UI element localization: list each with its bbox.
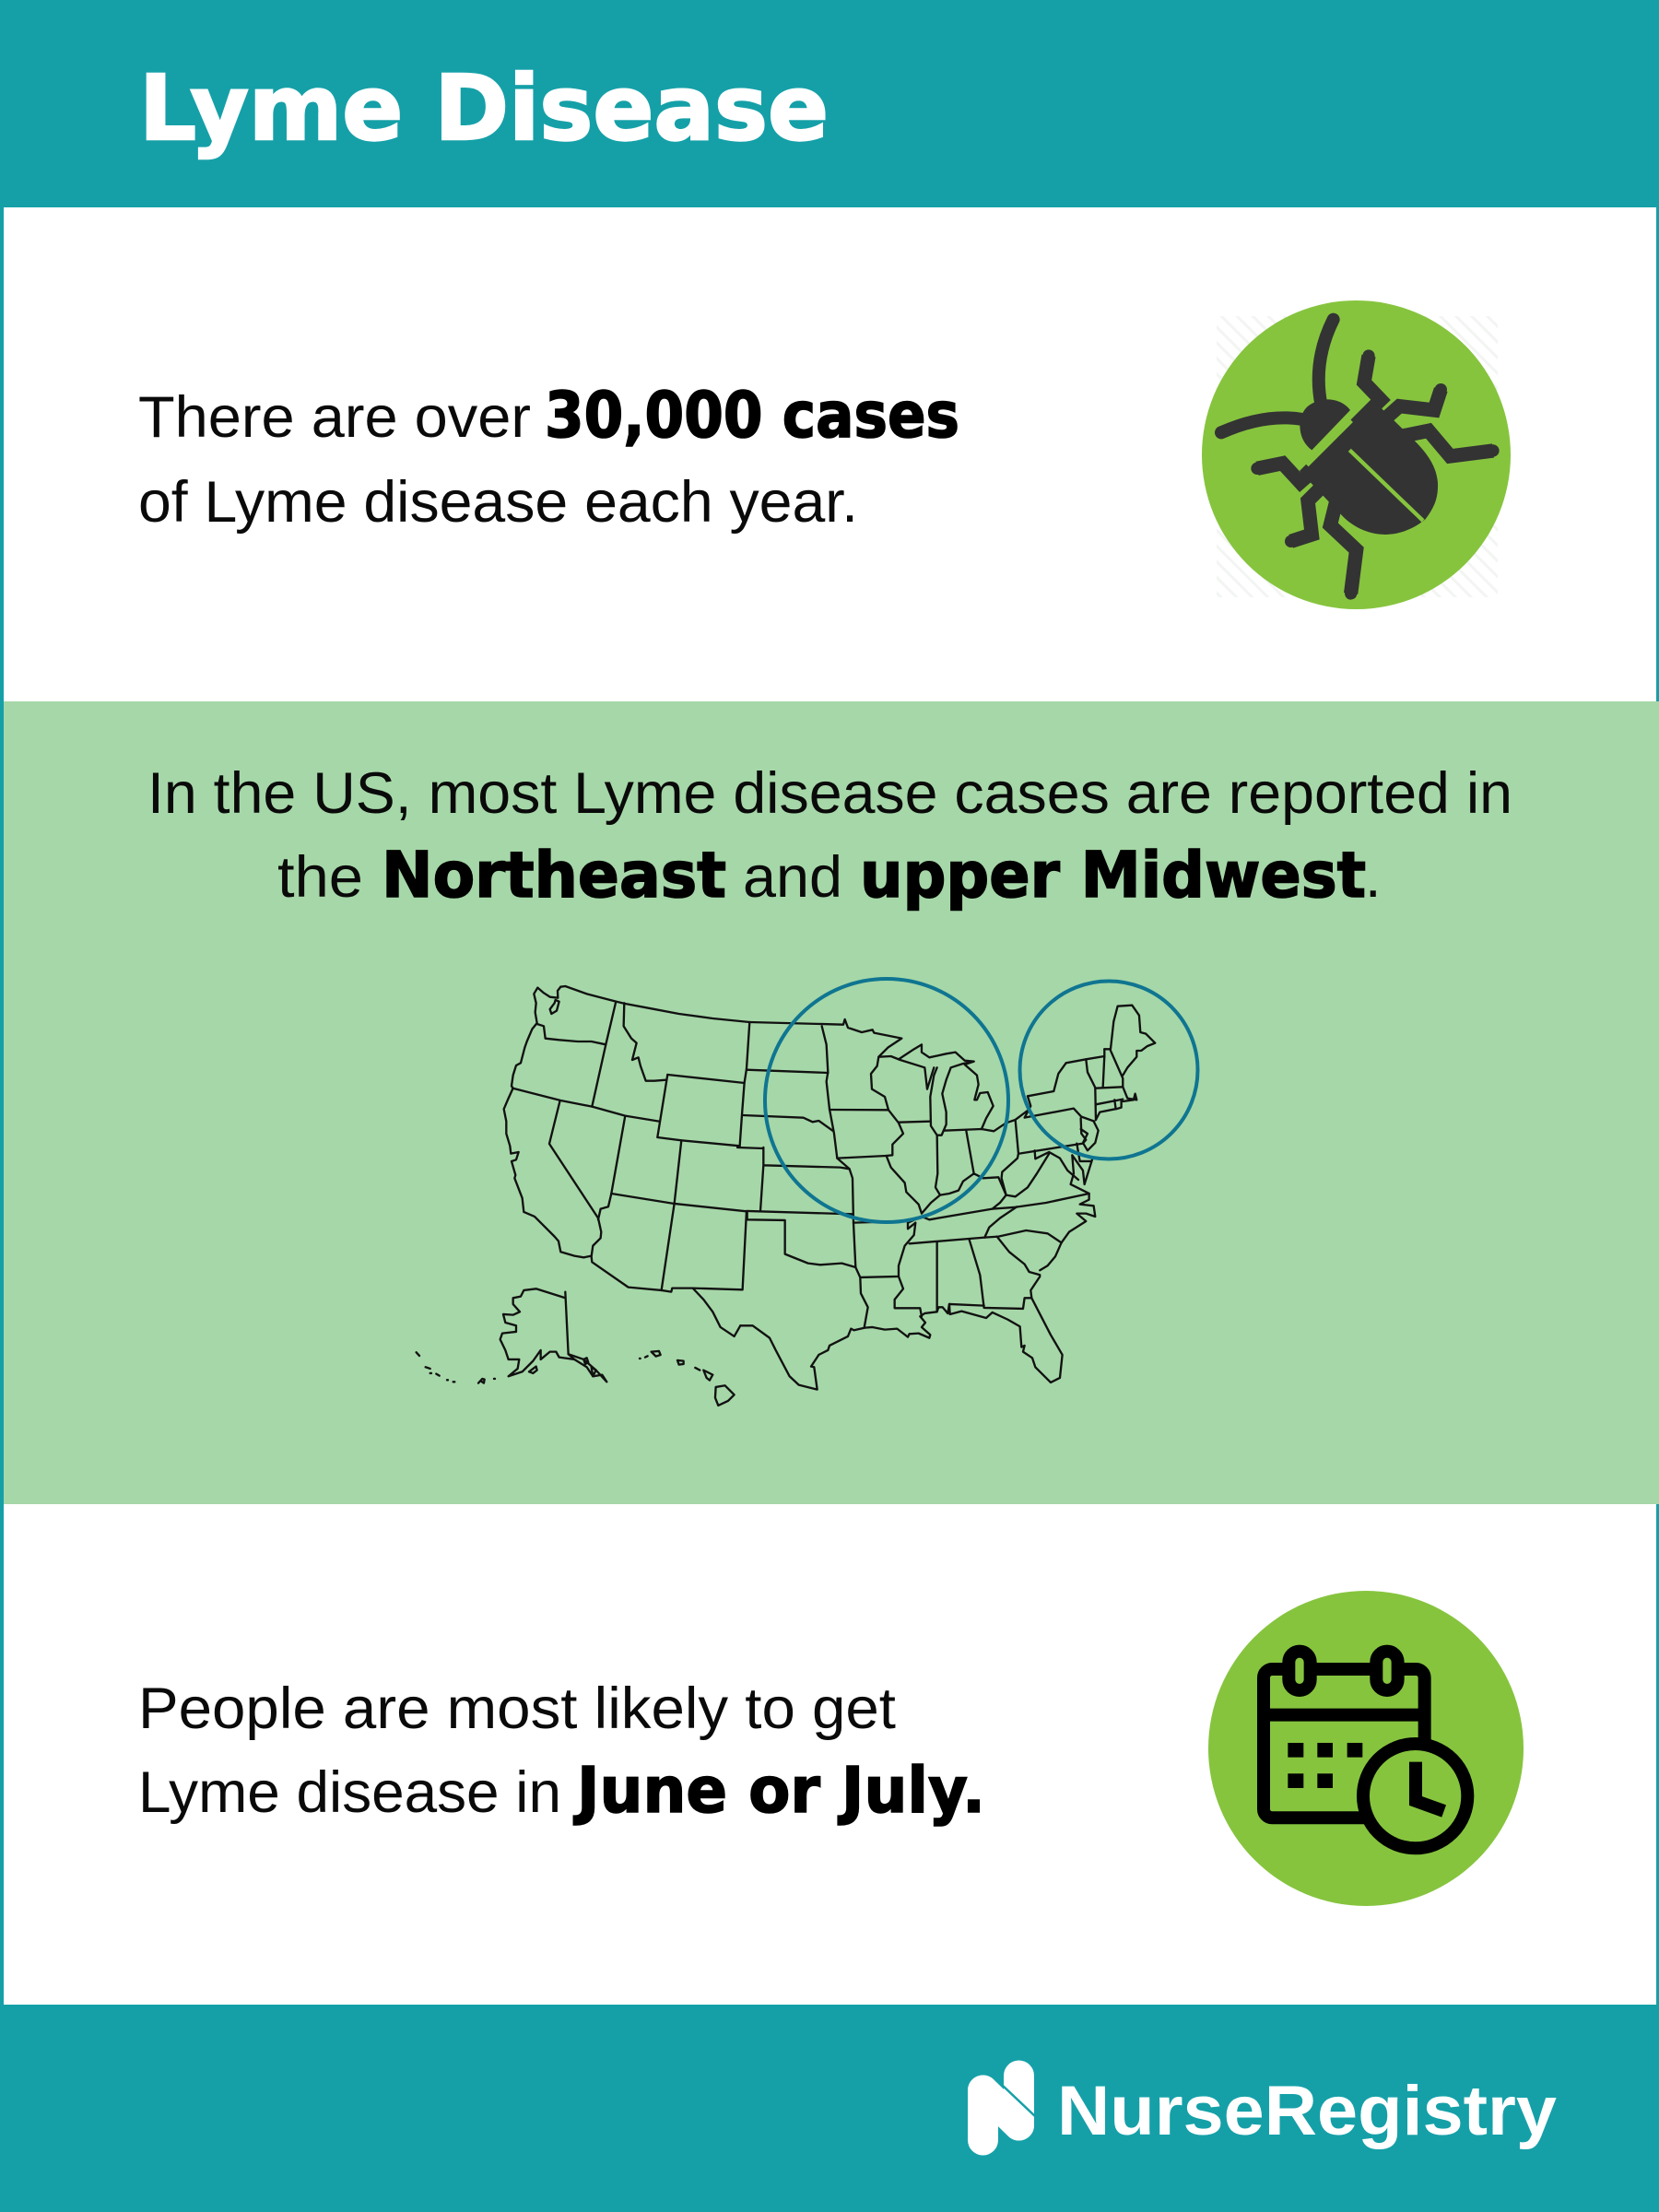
text: June or July bbox=[138, 1677, 985, 1828]
map: United States outline bbox=[417, 986, 1155, 1406]
text: Northeast and upper Midwest: and bbox=[743, 845, 842, 910]
text: June or July: People are most likely to get bbox=[138, 1677, 896, 1741]
panel: peak months bbox=[4, 1504, 1656, 2005]
text: over 30,000 cases bbox=[138, 379, 959, 535]
text: over 30,000 cases: 30,000 cases bbox=[545, 379, 959, 453]
text: over 30,000 cases: of Lyme disease each year. bbox=[138, 470, 858, 535]
text: Northeast and upper Midwest bbox=[147, 761, 1512, 912]
text: over 30,000 cases: There are over bbox=[138, 385, 531, 450]
icon: calendar and clock bbox=[1208, 1591, 1524, 1906]
circle: upper Midwest highlight bbox=[765, 979, 1008, 1222]
text: Northeast and upper Midwest: the bbox=[277, 845, 363, 910]
icon: tick in green circle bbox=[1202, 300, 1511, 609]
circle: Northeast highlight bbox=[1019, 981, 1198, 1159]
text: Northeast and upper Midwest: Northeast bbox=[382, 839, 726, 912]
panel: US map section bbox=[4, 701, 1659, 1504]
icon: N mark bbox=[982, 2076, 1036, 2140]
text: June or July: June or July. bbox=[573, 1754, 985, 1828]
text: Northeast and upper Midwest: upper Midwest bbox=[860, 839, 1366, 912]
panel: header bbox=[0, 0, 1659, 207]
logo: NurseRegistry bbox=[982, 2072, 1557, 2150]
logo wordmark: NurseRegistry bbox=[1057, 2072, 1557, 2150]
text: Northeast and upper Midwest: In the US, most Lyme disease cases are reported in bbox=[147, 761, 1512, 826]
title: Lyme Disease bbox=[139, 56, 829, 160]
text: Northeast and upper Midwest: . bbox=[1365, 845, 1382, 910]
panel: footer bbox=[0, 2005, 1659, 2212]
panel: cases per year bbox=[4, 207, 1656, 701]
text: June or July: Lyme disease in bbox=[138, 1760, 561, 1825]
